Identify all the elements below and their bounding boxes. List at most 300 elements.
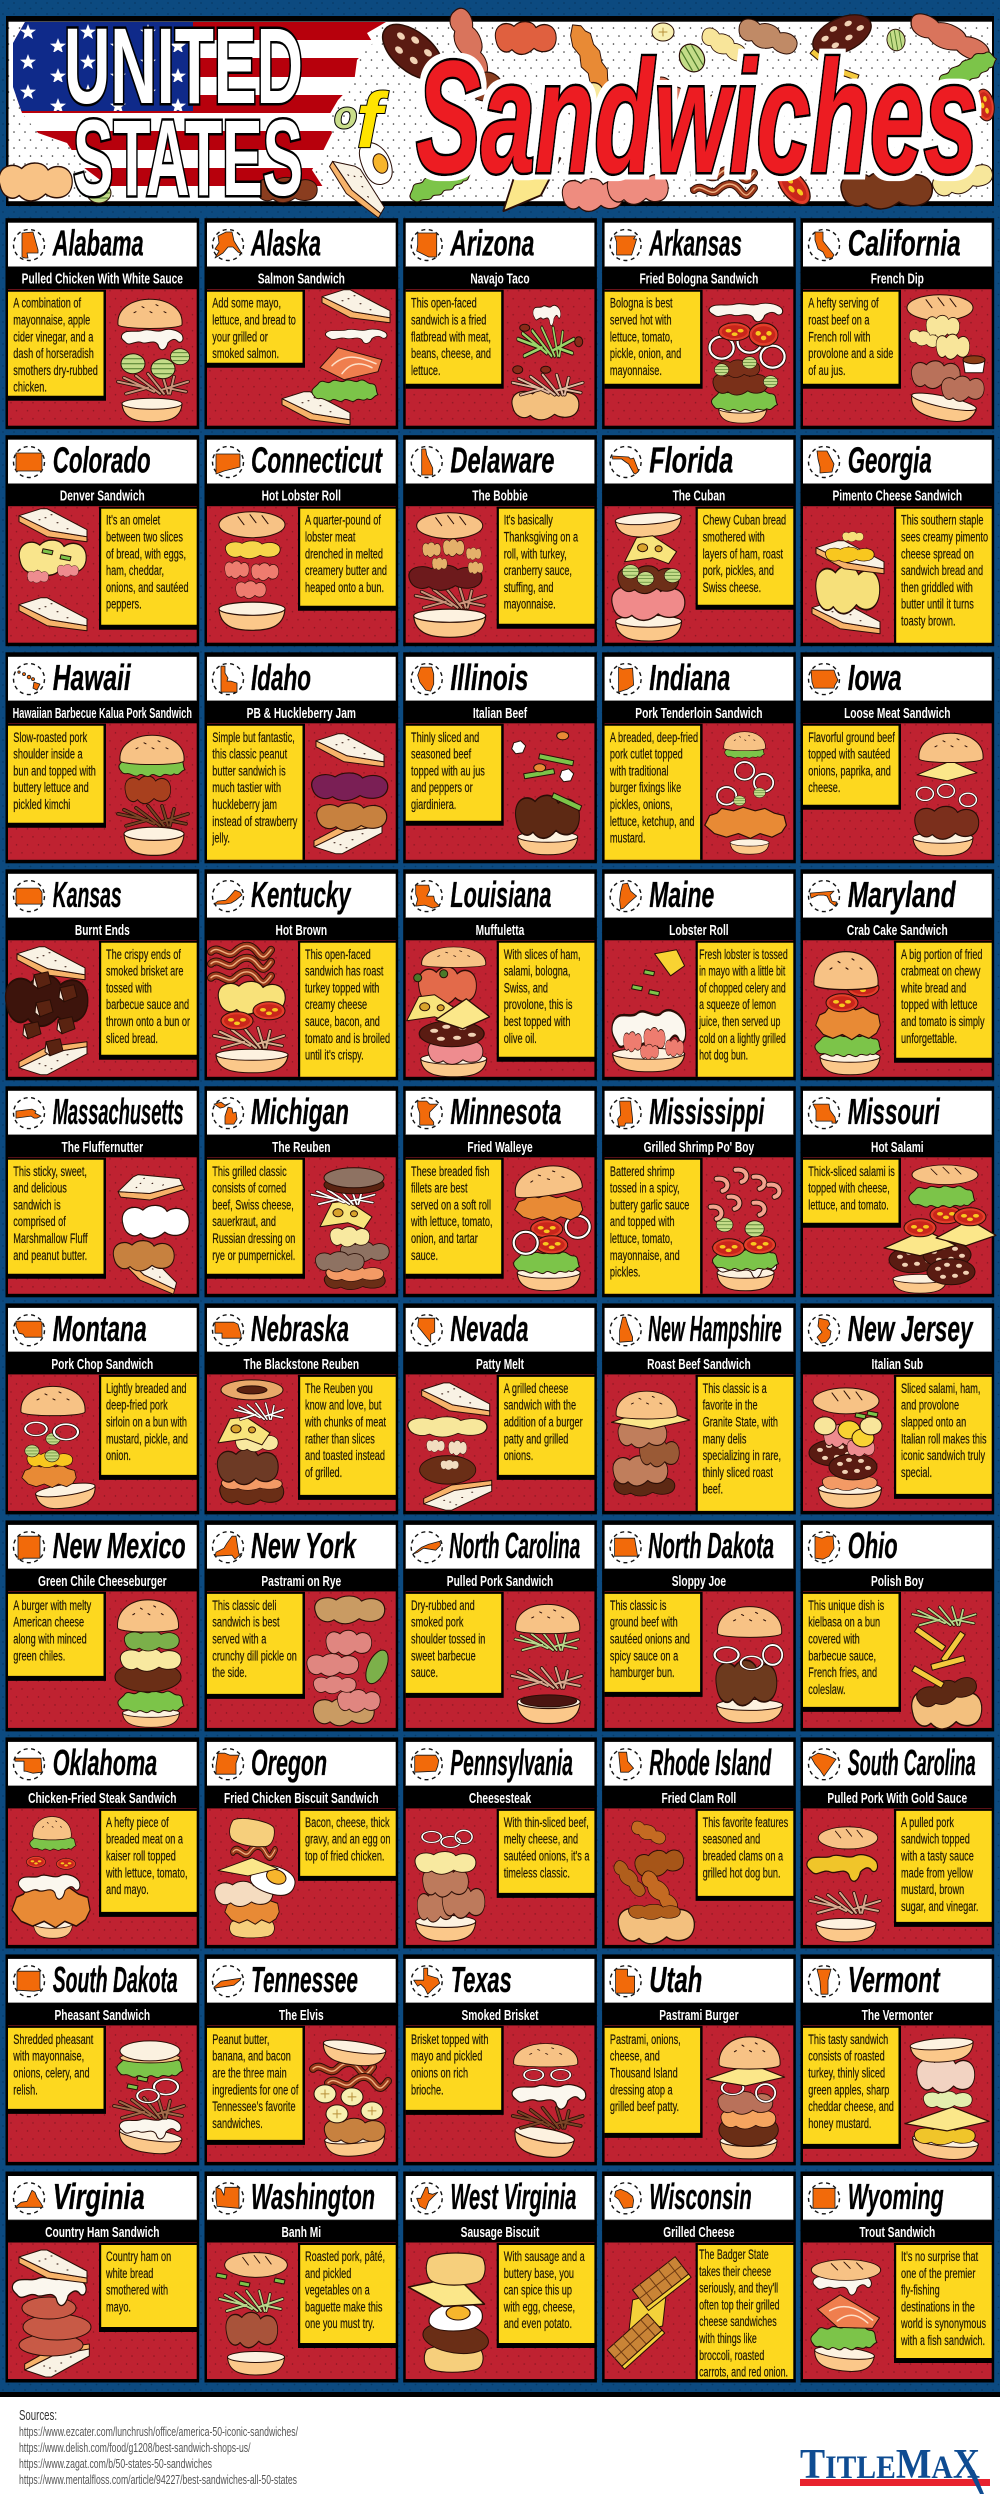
description box: Chewy Cuban bread xyxy=(703,512,786,528)
state icon: Kansas xyxy=(14,881,44,912)
illustration: roast beef sandwich xyxy=(612,1391,690,1496)
state name: Wisconsin xyxy=(649,2176,752,2217)
state name: Montana xyxy=(53,1308,147,1349)
illustration: pulled pork with gold sauce xyxy=(807,1827,880,1942)
description box: onion, and tartar xyxy=(411,1230,478,1247)
description box: A hefty piece of xyxy=(106,1814,169,1830)
description box: topped with sautéed xyxy=(808,746,890,762)
description box: and peppers or xyxy=(411,779,473,796)
state name: New Mexico xyxy=(53,1525,186,1566)
sandwich name: Fried Walleye xyxy=(467,1138,533,1155)
panel: Iowa xyxy=(800,652,994,863)
state name: Iowa xyxy=(848,657,902,698)
panel: Maine xyxy=(602,869,796,1080)
sandwich name: Cheesesteak xyxy=(469,1789,532,1806)
description box: honey mustard. xyxy=(808,2115,871,2131)
panel: Rhode Island xyxy=(602,1737,796,1948)
state icon: Colorado xyxy=(14,446,44,478)
illustration: sloppy joe xyxy=(715,1607,783,1723)
panel: Montana xyxy=(6,1303,199,1514)
description box: It's an omelet xyxy=(106,512,161,528)
state name: Tennessee xyxy=(251,1959,358,2000)
illustration: pastrami burger xyxy=(707,2037,785,2159)
description box: cold on a lightly grilled xyxy=(699,1031,786,1046)
sandwich name: Pimento Cheese Sandwich xyxy=(832,487,962,504)
sandwich name: The Elvis xyxy=(279,2006,324,2023)
description box: Sliced salami, ham, xyxy=(901,1380,980,1396)
description box: with chunks of meat xyxy=(304,1413,387,1430)
description box: baguette make this xyxy=(305,2298,383,2315)
state icon: Wyoming xyxy=(808,2183,840,2214)
description box: world is synonymous xyxy=(900,2315,986,2332)
description box: sauce. xyxy=(411,1664,438,1681)
state icon: Arkansas xyxy=(610,230,641,260)
state name: Vermont xyxy=(848,1959,941,2000)
description box xyxy=(8,724,106,828)
state name: Kentucky xyxy=(251,874,352,915)
panel: Massachusetts xyxy=(6,1086,199,1297)
description box xyxy=(894,1375,992,1499)
description box: sandwich is best xyxy=(212,1614,280,1630)
state name: Illinois xyxy=(450,657,528,698)
description box: lettuce, and bread to xyxy=(212,311,296,328)
description box: Marshmallow Fluff xyxy=(13,1230,88,1247)
description box: This open-faced xyxy=(411,295,477,311)
description box xyxy=(99,1809,197,1917)
description box xyxy=(605,1158,703,1294)
sandwich name: Pulled Chicken With White Sauce xyxy=(22,270,183,287)
state icon: Texas xyxy=(411,1966,442,1997)
description box: and provolone xyxy=(901,1397,959,1413)
description box: cranberry sauce, xyxy=(504,562,572,579)
description box: Thousand Island xyxy=(610,2064,678,2081)
description box: butter until it turns xyxy=(901,596,974,612)
description box: flatbread with meat, xyxy=(411,328,491,345)
description box: A combination of xyxy=(13,295,82,311)
panel: Connecticut xyxy=(204,435,398,646)
description box xyxy=(207,724,305,860)
illustration: pork tenderloin sandwich xyxy=(705,732,786,854)
description box: dressing atop a xyxy=(610,2081,673,2098)
panel: New Mexico xyxy=(6,1520,199,1731)
description box: mayo. xyxy=(106,2298,131,2315)
description box: This classic is a xyxy=(703,1380,767,1396)
description box xyxy=(298,507,396,611)
state name: Kansas xyxy=(53,874,122,915)
sandwich name: Pork Tenderloin Sandwich xyxy=(635,704,763,721)
description box: seasoned and xyxy=(703,1831,760,1847)
description box: smoked brisket are xyxy=(106,963,184,979)
description box: These breaded fish xyxy=(411,1163,489,1179)
panel: Georgia xyxy=(800,435,994,646)
sandwich name: Hawaiian Barbecue Kalua Pork Sandwich xyxy=(13,705,192,721)
state icon: Montana xyxy=(14,1315,44,1346)
description box: stuffing, and xyxy=(504,579,553,595)
illustration: italian sub xyxy=(809,1388,882,1508)
description box: It's no surprise that xyxy=(901,2248,979,2265)
sandwich name: Patty Melt xyxy=(476,1355,525,1372)
description box: grilled beef patty. xyxy=(610,2098,679,2115)
description box: breaded meat on a xyxy=(106,1831,183,1847)
description box: Dry-rubbed and xyxy=(411,1597,475,1613)
description box: specializing in rare, xyxy=(703,1447,781,1464)
description box: kaiser roll topped xyxy=(106,1847,176,1864)
description box: The crispy ends of xyxy=(106,946,181,962)
description box: can spice this up xyxy=(504,2282,572,2298)
description box xyxy=(497,941,595,1062)
sandwich name: Pheasant Sandwich xyxy=(54,2006,150,2023)
description box: sirloin on a bun with xyxy=(106,1413,187,1430)
panel: Oregon xyxy=(204,1737,398,1948)
description box: timeless classic. xyxy=(504,1864,570,1881)
description box: turkey topped with xyxy=(305,979,379,996)
description box: chicken. xyxy=(13,379,47,395)
state icon: New Jersey xyxy=(808,1315,840,1346)
panel: North Dakota xyxy=(602,1520,796,1731)
description box: A grilled cheese xyxy=(504,1380,569,1396)
description box: seriously, and they'll xyxy=(699,2281,778,2296)
description box: The Badger State xyxy=(699,2247,769,2263)
description box: smoked pork xyxy=(411,1614,464,1630)
description box: beef, Swiss cheese, xyxy=(212,1196,294,1213)
description box xyxy=(605,1592,703,1697)
state icon: Louisiana xyxy=(411,881,442,912)
state name: Connecticut xyxy=(251,440,383,481)
description box: mayonnaise, and xyxy=(610,1247,680,1263)
description box: with traditional xyxy=(609,762,668,779)
state name: Georgia xyxy=(848,440,932,481)
description box: comprised of xyxy=(13,1213,66,1230)
state name: Texas xyxy=(451,1959,512,2000)
heading: United States: STATES xyxy=(73,97,303,218)
description box xyxy=(207,290,305,368)
state icon: California xyxy=(808,230,840,260)
description box: much tastier with xyxy=(212,779,281,796)
sandwich name: Lobster Roll xyxy=(669,921,729,938)
description box: topped with cheese, xyxy=(808,1180,890,1196)
description box: Fresh lobster is tossed xyxy=(699,947,788,962)
description box: pork cutlet topped xyxy=(610,746,683,762)
description box: and mayo. xyxy=(106,1881,149,1898)
illustration: fried walleye xyxy=(512,1162,590,1291)
description box xyxy=(298,1375,396,1500)
description box: salami, bologna, xyxy=(504,963,570,979)
description box: onions, paprika, and xyxy=(808,762,891,779)
sandwich name: PB & Huckleberry Jam xyxy=(247,704,356,721)
illustration: pork chop sandwich xyxy=(21,1386,98,1512)
description box: toasty brown. xyxy=(901,612,956,629)
description box: fly-fishing xyxy=(901,2282,940,2298)
state name: Utah xyxy=(649,1959,702,2000)
description box xyxy=(894,507,992,643)
state name: New York xyxy=(251,1525,357,1566)
state name: West Virginia xyxy=(450,2176,576,2217)
description box: served on a soft roll xyxy=(411,1196,491,1213)
panel: Wyoming xyxy=(800,2172,994,2382)
description box: best topped with xyxy=(504,1013,570,1030)
illustration: loose meat sandwich xyxy=(913,733,983,856)
sandwich name: The Bobbie xyxy=(472,487,528,504)
illustration: trout sandwich xyxy=(811,2260,883,2374)
panel: New Hampshire: New Hampshire xyxy=(648,1308,782,1349)
description box: beans, cheese, and xyxy=(411,345,491,362)
title banner xyxy=(0,5,1000,220)
description box xyxy=(803,2026,901,2149)
illustration: smoked brisket xyxy=(511,2044,586,2161)
description box: This grilled classic xyxy=(212,1163,287,1179)
sandwich name: The Reuben xyxy=(272,1138,331,1155)
state name: Maine xyxy=(649,874,714,915)
description box: Lightly breaded and xyxy=(106,1380,187,1396)
description box: sees creamy pimento xyxy=(901,528,988,545)
description box: smothers dry-rubbed xyxy=(13,362,98,378)
state icon: Michigan xyxy=(212,1098,244,1129)
illustration: burnt ends xyxy=(6,947,88,1075)
description box: melty cheese, and xyxy=(504,1831,578,1847)
description box: sauce. xyxy=(411,1247,438,1263)
state icon: Kentucky xyxy=(212,881,244,912)
description box: rather than slices xyxy=(305,1430,375,1447)
description box: ground beef with xyxy=(610,1614,678,1630)
description box: carrots, and red onion. xyxy=(699,2365,788,2380)
description box: Brisket topped with xyxy=(411,2031,488,2047)
description box: Swiss, and xyxy=(504,979,548,996)
description box xyxy=(497,1375,595,1480)
description box: turkey, thinly sliced xyxy=(808,2064,885,2081)
state name: North Dakota xyxy=(648,1525,774,1566)
state icon: West Virginia xyxy=(411,2183,442,2214)
panel: Maryland xyxy=(800,869,994,1080)
illustration: peanut butter and jam xyxy=(312,734,388,854)
panel: Kansas xyxy=(6,869,199,1080)
panel: Tennessee xyxy=(204,1954,398,2165)
description box xyxy=(497,2243,595,2348)
state name: Michigan xyxy=(251,1091,349,1132)
description box: banana, and bacon xyxy=(212,2048,291,2064)
panel: Nevada xyxy=(403,1303,597,1514)
panel: Hawaii xyxy=(6,652,199,863)
state name: Idaho xyxy=(251,657,311,698)
description box: one of the premier xyxy=(901,2265,975,2281)
description box xyxy=(207,2026,305,2145)
description box: unforgettable. xyxy=(901,1030,957,1046)
heading: of: o xyxy=(334,95,357,137)
description box xyxy=(99,2243,197,2332)
description box: and even potato. xyxy=(504,2315,572,2332)
description box: with a tasty sauce xyxy=(900,1847,974,1864)
illustration: the bobbie xyxy=(409,513,486,637)
panel: New Jersey xyxy=(800,1303,994,1514)
state name: Virginia xyxy=(53,2176,145,2217)
description box: with mayonnaise, xyxy=(13,2048,84,2064)
description box: made from yellow xyxy=(901,1864,973,1881)
panel: South Carolina xyxy=(800,1737,994,1948)
sandwich name: Chicken-Fried Steak Sandwich xyxy=(28,1789,177,1806)
description box: with egg, cheese, xyxy=(503,2298,575,2315)
description box xyxy=(696,507,794,610)
sandwich name: Pulled Pork Sandwich xyxy=(447,1572,553,1589)
description box xyxy=(803,1592,901,1712)
panel: Minnesota xyxy=(403,1086,597,1297)
description box: Italian roll makes this xyxy=(901,1430,987,1447)
description box: mayonnaise, apple xyxy=(13,311,91,328)
description box: ham, cheddar, xyxy=(106,562,164,579)
description box: With sausage and a xyxy=(504,2248,585,2265)
panel: Alabama xyxy=(6,218,199,429)
panel: Delaware xyxy=(403,435,597,646)
description box xyxy=(696,1809,794,1901)
description box xyxy=(406,290,504,389)
state name: Arkansas xyxy=(649,223,742,264)
state icon: Hawaii xyxy=(14,664,44,695)
description box: buttery base, you xyxy=(504,2265,574,2281)
sandwich name: Fried Chicken Biscuit Sandwich xyxy=(224,1789,379,1806)
description box xyxy=(207,1158,305,1279)
description box xyxy=(8,1158,106,1279)
panel: Vermont xyxy=(800,1954,994,2165)
sandwich name: Crab Cake Sandwich xyxy=(847,921,948,938)
description box: Thinly sliced and xyxy=(411,729,479,745)
description box: A hefty serving of xyxy=(808,295,879,311)
description box: crunchy dill pickle on xyxy=(212,1647,297,1664)
description box: Swiss cheese. xyxy=(703,579,761,595)
description box xyxy=(696,1375,794,1511)
description box: and toasted instead xyxy=(305,1447,385,1464)
description box: barbecue sauce, xyxy=(808,1647,876,1664)
description box: giardiniera. xyxy=(411,796,456,813)
description box: between two slices xyxy=(106,528,183,545)
panel: Alaska xyxy=(204,218,398,429)
description box: cheese, and xyxy=(610,2048,660,2064)
description box: French fries, and xyxy=(808,1664,877,1681)
description box: Tennessee's favorite xyxy=(212,2098,296,2115)
illustration: the cuban xyxy=(612,511,685,641)
description box: sliced bread. xyxy=(106,1030,158,1046)
description box: shoulder tossed in xyxy=(411,1630,485,1647)
description box xyxy=(8,290,106,401)
description box xyxy=(696,2243,794,2380)
description box: onions, and sautéed xyxy=(106,579,189,595)
sandwich name: The Fluffernutter xyxy=(62,1138,143,1155)
description box xyxy=(605,290,703,389)
illustration: italian beef xyxy=(512,732,582,855)
panel: Utah xyxy=(602,1954,796,2165)
description box: It's basically xyxy=(504,512,553,528)
description box: tomato and is broiled xyxy=(305,1030,390,1046)
description box: many delis xyxy=(703,1430,746,1447)
illustration: sausage biscuit xyxy=(406,2253,490,2372)
state icon: South Dakota xyxy=(14,1966,44,1997)
description box: green apples, sharp xyxy=(808,2081,890,2098)
panel: California xyxy=(800,218,994,429)
description box: layers of ham, roast xyxy=(703,545,784,562)
state name: Missouri xyxy=(848,1091,940,1132)
illustration: banh mi xyxy=(216,2253,287,2375)
description box: white bread and xyxy=(900,979,966,996)
description box xyxy=(894,2243,992,2363)
description box: sauce, bacon, and xyxy=(305,1013,380,1030)
illustration: chicken-fried steak sandwich xyxy=(12,1816,90,1938)
description box: buttery garlic sauce xyxy=(610,1196,690,1213)
description box: cider vinegar, and a xyxy=(13,328,94,345)
description box xyxy=(99,1375,197,1480)
description box: cheese. xyxy=(808,779,840,796)
state icon: Massachusetts xyxy=(14,1098,44,1129)
state icon: Tennessee xyxy=(212,1966,244,1997)
description box: sandwich is xyxy=(13,1196,61,1213)
state icon: Nevada xyxy=(411,1315,442,1346)
state icon: Illinois xyxy=(411,664,442,695)
description box: Thanksgiving on a xyxy=(504,528,578,545)
description box: the side. xyxy=(212,1664,247,1681)
panel: Idaho xyxy=(204,652,398,863)
description box: often top their grilled xyxy=(699,2297,780,2313)
description box: instead of strawberry xyxy=(212,813,297,829)
sandwich name: Hot Brown xyxy=(276,921,327,938)
description box: tossed with xyxy=(106,979,152,996)
illustration: cheesesteak xyxy=(415,1830,485,1941)
description box: pickle, onion, and xyxy=(610,345,681,362)
description box: olive oil. xyxy=(504,1030,537,1046)
state icon: Pennsylvania xyxy=(411,1749,442,1780)
state icon: Utah xyxy=(610,1966,641,1997)
description box: This unique dish is xyxy=(808,1597,884,1613)
description box: Battered shrimp xyxy=(610,1163,675,1179)
sandwich name: Burnt Ends xyxy=(75,921,130,938)
panel: Kentucky xyxy=(204,869,398,1080)
description box: pickles. xyxy=(610,1264,640,1280)
description box: smothered with xyxy=(703,528,765,545)
state icon: Florida xyxy=(610,446,641,478)
description box: in mayo with a little bit xyxy=(699,964,786,979)
state icon: Washington xyxy=(212,2183,244,2214)
sources xyxy=(19,2407,298,2487)
description box: sandwiches. xyxy=(212,2115,263,2131)
state icon: Arizona xyxy=(411,230,442,260)
description box: kielbasa on a bun xyxy=(808,1614,880,1630)
state name: Minnesota xyxy=(450,1091,561,1132)
description box: cheddar cheese, and xyxy=(808,2098,894,2115)
panel: Louisiana xyxy=(403,869,597,1080)
sandwich name: Hot Lobster Roll xyxy=(262,487,341,504)
sandwich name: Sloppy Joe xyxy=(672,1572,726,1589)
description box: Slow-roasted pork xyxy=(13,729,87,745)
state name: Ohio xyxy=(848,1525,898,1566)
description box: provolone and a side xyxy=(808,345,894,362)
description box: Thick-sliced salami is xyxy=(808,1163,895,1179)
description box: sandwich has roast xyxy=(305,963,384,979)
state icon: Minnesota xyxy=(411,1098,442,1129)
state icon: Oregon xyxy=(212,1749,244,1780)
description box: Country ham on xyxy=(106,2248,171,2265)
sandwich name: French Dip xyxy=(871,270,924,287)
illustration: the elvis xyxy=(313,2037,388,2158)
description box: onions, celery, and xyxy=(13,2064,90,2081)
description box: deep-fried pork xyxy=(106,1397,168,1413)
illustration: hot salami xyxy=(884,1165,996,1293)
description box: slapped onto an xyxy=(901,1413,966,1430)
description box xyxy=(298,1809,396,1881)
panel: Indiana xyxy=(602,652,796,863)
state name: Colorado xyxy=(53,440,151,481)
state name: Florida xyxy=(649,440,733,481)
description box: brioche. xyxy=(411,2081,444,2098)
state icon: Delaware xyxy=(411,446,442,478)
state icon: Alabama xyxy=(14,230,44,260)
description box: thrown onto a bun or xyxy=(106,1013,190,1030)
description box: vegetables on a xyxy=(305,2282,370,2298)
state name: Louisiana xyxy=(450,874,551,915)
